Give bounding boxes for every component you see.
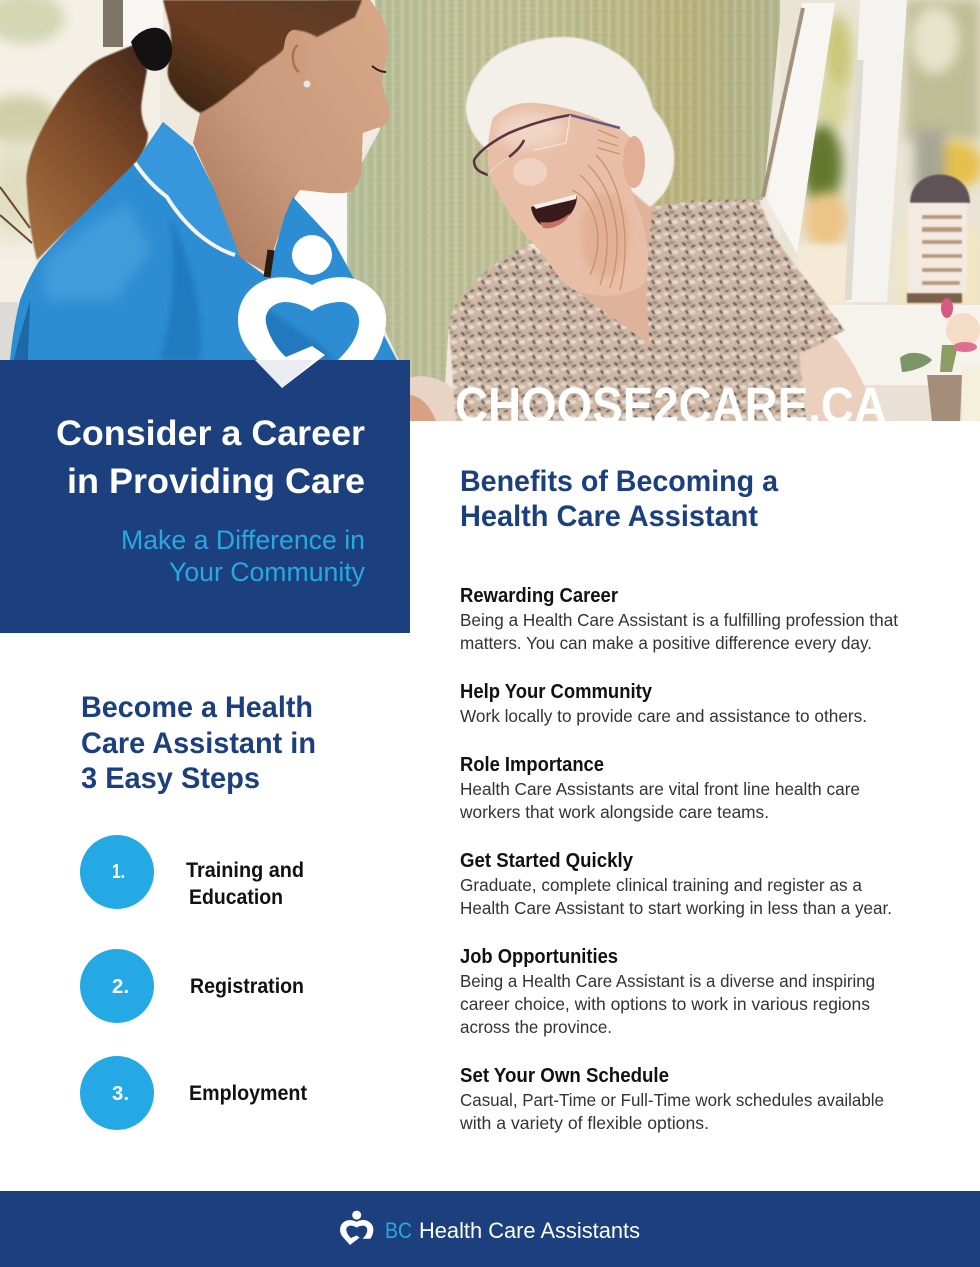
cheek wrinkles: [572, 130, 625, 290]
heading: [56, 414, 365, 501]
footer band: Health Care Assistants: [419, 1218, 640, 1243]
footer band: [0, 1191, 980, 1267]
eye lashes: [372, 66, 386, 72]
heading: three steps: [81, 691, 316, 795]
benefit: role importance: Health Care Assistants are vital front line health care: [460, 779, 860, 799]
step 3: [80, 1056, 307, 1130]
benefit: rewarding career: Being a Health Care Assistant is a fulfilling profession that: [460, 610, 898, 630]
subheading: Your Community: [169, 557, 365, 587]
blouse: [449, 200, 845, 421]
heading: Consider a Career: [56, 414, 365, 453]
left window background: [0, 0, 355, 362]
panel: career headline: [0, 360, 410, 633]
ear and earring: [284, 30, 296, 50]
benefit: role importance: workers that work alongside care teams.: [459, 802, 769, 822]
nurse: [10, 0, 397, 360]
benefit: rewarding career: matters. You can make a positive difference every day.: [460, 633, 872, 653]
benefit: role importance: [459, 754, 860, 822]
benefit: help your community: [460, 681, 867, 726]
brand name: BC: [385, 1218, 412, 1243]
blue uniform: [10, 122, 397, 360]
smile teeth: [362, 128, 377, 152]
benefit: job opportunities: Job Opportunities: [460, 946, 618, 968]
lamp: [907, 174, 970, 303]
window sill: [826, 305, 980, 385]
elderly woman: [410, 37, 877, 421]
heading: benefits: Benefits of Becoming a: [460, 465, 778, 498]
benefit: get started quickly: [460, 850, 892, 918]
icon: large heart logo: [238, 235, 386, 388]
heading: benefits: Health Care Assistant: [460, 500, 758, 533]
heading: three steps: Become a Health: [81, 691, 313, 724]
step 1: 1.: [112, 861, 125, 883]
benefit: rewarding career: Rewarding Career: [460, 585, 618, 607]
benefit: set your own schedule: with a variety of flexible options.: [459, 1113, 709, 1133]
right window background: [763, 0, 980, 421]
benefit: set your own schedule: Casual, Part-Time or Full-Time work schedules available: [460, 1090, 884, 1110]
benefit: job opportunities: career choice, with options to work in various regions: [460, 994, 870, 1014]
white hair: [466, 37, 674, 207]
step 1: Training and: [186, 858, 304, 882]
hair: [163, 0, 362, 113]
neck and face: [193, 0, 390, 273]
step 3: 3.: [112, 1083, 129, 1105]
woven green chair: [347, 0, 782, 385]
benefit: set your own schedule: Set Your Own Schedule: [460, 1065, 669, 1087]
nose: [513, 158, 547, 186]
step 1: [80, 835, 304, 909]
subheading: Make a Difference in: [121, 525, 365, 555]
step 1: Education: [189, 885, 283, 909]
subheading: [121, 525, 365, 587]
benefit: get started quickly: Graduate, complete clinical training and register as a: [460, 875, 862, 895]
benefit: get started quickly: Get Started Quickly: [460, 850, 634, 872]
benefit: job opportunities: across the province.: [460, 1017, 612, 1037]
website address: CHOOSE2CARE.CA: [455, 377, 887, 434]
benefit: rewarding career: [460, 585, 898, 653]
glasses: [474, 115, 620, 175]
benefit: help your community: Work locally to provide care and assistance to others.: [460, 706, 867, 726]
ponytail: [26, 44, 148, 260]
heading: three steps: 3 Easy Steps: [81, 762, 260, 795]
step 3: Employment: [189, 1081, 307, 1105]
window frame struts: [767, 3, 835, 253]
bokeh garden: [905, 0, 980, 140]
step 2: [80, 949, 304, 1023]
icon: small heart logo: [340, 1211, 373, 1245]
scrunchie: [131, 28, 172, 71]
benefit: job opportunities: Being a Health Care Assistant is a diverse and inspiring: [460, 971, 875, 991]
neck collar edge: [646, 210, 708, 345]
right arm: [798, 337, 877, 421]
face: [487, 103, 648, 296]
collar with white piping: [135, 122, 240, 257]
potted plant: [900, 298, 980, 421]
benefit: set your own schedule: [459, 1065, 884, 1133]
hero photo: nurse and laughing elderly woman: [0, 0, 980, 434]
left arm lace sleeve: [410, 376, 462, 421]
step 2: Registration: [190, 974, 304, 998]
benefit: role importance: Role Importance: [460, 754, 604, 776]
open laughing mouth: [531, 195, 577, 227]
step 2: 2.: [112, 976, 129, 998]
benefit: job opportunities: [460, 946, 875, 1037]
heading: three steps: Care Assistant in: [81, 727, 316, 760]
benefit: get started quickly: Health Care Assistant to start working in less than a year.: [460, 898, 892, 918]
heading: benefits: [460, 465, 778, 533]
heading: in Providing Care: [67, 462, 365, 501]
neck: [575, 191, 657, 345]
benefit: help your community: Help Your Community: [460, 681, 653, 703]
